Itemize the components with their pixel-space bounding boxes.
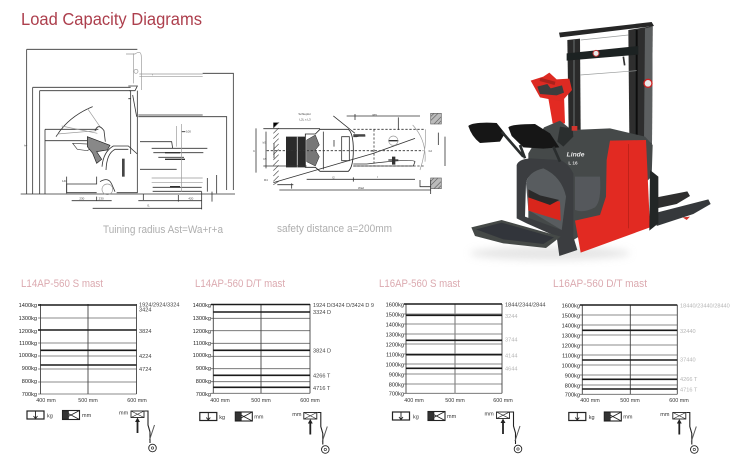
mast height labels: 4266 T xyxy=(680,377,698,383)
y axis labels: 900kg xyxy=(196,366,211,372)
x axis labels: 400 mm xyxy=(36,398,56,404)
y axis labels: 1600kg xyxy=(386,302,404,308)
mast height labels xyxy=(505,302,545,372)
y axis labels: 1400kg xyxy=(19,303,37,309)
mast height labels: 18440/23440/28440 xyxy=(680,304,730,310)
icons: load, centre of gravity, mast: kg xyxy=(219,415,225,421)
top view technical drawing: b xyxy=(253,149,255,153)
top view technical drawing: l xyxy=(377,175,378,179)
red side panel xyxy=(575,140,650,253)
side view technical drawing: h4 xyxy=(24,144,28,148)
mast xyxy=(567,39,581,130)
handles and console xyxy=(73,143,93,151)
plot lines xyxy=(580,305,677,394)
armrests xyxy=(468,123,505,143)
icons: load, centre of gravity, mast xyxy=(569,412,698,453)
mast height labels xyxy=(139,302,179,373)
x axis labels: 400 mm xyxy=(580,398,600,404)
mast height labels: 3824 xyxy=(139,329,151,335)
y axis labels: 800kg xyxy=(389,382,404,388)
chart title: L14AP-560 D/T mast xyxy=(195,278,285,290)
floor shadow xyxy=(470,247,630,260)
forks xyxy=(353,135,415,166)
icons: load, centre of gravity, mast: mm xyxy=(623,414,633,420)
right corner hatched pallets xyxy=(431,113,441,189)
mast height labels xyxy=(313,303,374,392)
title: Load Capacity Diagrams xyxy=(21,9,202,29)
top view technical drawing: R4 xyxy=(264,178,268,182)
y axis labels xyxy=(562,304,580,398)
logo on body: Linde xyxy=(567,152,585,159)
y axis labels: 1100kg xyxy=(386,352,404,358)
platform xyxy=(471,220,561,248)
mast height labels: 4644 xyxy=(505,366,517,372)
y axis labels: 1400kg xyxy=(193,303,211,309)
y axis labels: 1200kg xyxy=(19,329,37,335)
safety distance note: safety distance a=200mm xyxy=(277,223,392,235)
chart title: L16AP-560 D/T mast xyxy=(553,278,647,290)
side view technical drawing: 140 xyxy=(62,179,67,183)
dimensions xyxy=(256,114,445,194)
tiller xyxy=(548,95,565,123)
top view technical drawing: 365 xyxy=(372,113,377,117)
x axis labels: 600 mm xyxy=(669,398,689,404)
y axis labels: 1500kg xyxy=(562,314,580,320)
mast height labels: 3324 D xyxy=(313,310,331,316)
forklift truck photograph illustration xyxy=(468,22,711,260)
y axis labels: 1100kg xyxy=(193,341,211,347)
y axis labels: 1100kg xyxy=(19,341,37,347)
y axis labels xyxy=(193,303,211,398)
chart title: L14AP-560 S mast xyxy=(21,278,103,290)
icons: load, centre of gravity, mast: mm xyxy=(254,414,264,420)
y axis labels: 1300kg xyxy=(19,316,37,322)
hatched wall xyxy=(273,123,279,185)
x axis labels: 500 mm xyxy=(251,398,271,404)
y axis labels: 700kg xyxy=(196,392,211,398)
mast height labels: 37440 xyxy=(680,358,696,364)
x axis labels: 600 mm xyxy=(127,398,147,404)
top view technical drawing: Schlepfer xyxy=(298,112,311,116)
side view technical drawing: 230 xyxy=(79,196,85,200)
icons: load, centre of gravity, mast xyxy=(200,412,329,453)
y axis labels: 1000kg xyxy=(562,364,580,370)
mast height labels: 4224 xyxy=(139,354,151,360)
y axis labels: 1200kg xyxy=(386,342,404,348)
lowered forks xyxy=(152,178,203,182)
mast height labels: 4724 xyxy=(139,367,151,373)
y axis labels: 900kg xyxy=(22,366,37,372)
top view technical drawing: Wa2 xyxy=(358,186,364,190)
mast height labels: 1844/2344/2844 xyxy=(505,302,545,308)
x axis labels xyxy=(404,398,513,404)
icons: load, centre of gravity, mast: mm xyxy=(447,414,457,420)
side view technical drawing xyxy=(21,49,235,209)
mast height labels: 1924/2924/3324 xyxy=(139,302,179,308)
operator frame xyxy=(517,158,577,256)
top view technical drawing: b5 xyxy=(263,157,267,161)
mast height labels: 4716 T xyxy=(313,386,331,392)
truck chassis outline xyxy=(305,129,353,171)
icons: load, centre of gravity, mast: kg xyxy=(47,414,53,420)
battery block xyxy=(286,137,305,167)
icons: load, centre of gravity, mast: mm xyxy=(484,412,494,418)
y axis labels: 1000kg xyxy=(19,353,37,359)
y axis labels: 1300kg xyxy=(562,334,580,340)
main body dark shell xyxy=(528,121,653,240)
mast height labels: 3824 D xyxy=(313,348,331,354)
y axis labels: 900kg xyxy=(389,372,404,378)
red lower pod xyxy=(528,190,561,221)
dashed load box and centre lines xyxy=(267,129,425,166)
mast height labels xyxy=(680,304,730,394)
y axis labels: 1400kg xyxy=(386,322,404,328)
gray cylinder inside frame xyxy=(526,168,566,230)
icons: load, centre of gravity, mast: mm xyxy=(82,413,92,419)
pallet wheels xyxy=(388,140,398,165)
chart: L14AP-560 D/T mast xyxy=(193,278,374,453)
y axis labels: 900kg xyxy=(565,374,580,380)
x axis labels: 400 mm xyxy=(404,398,424,404)
ground line and vertical dimensions xyxy=(21,49,235,194)
x axis labels: 500 mm xyxy=(78,398,98,404)
bottom dimensions xyxy=(67,177,202,209)
side view technical drawing: 100 xyxy=(186,130,191,134)
top view technical drawing xyxy=(253,112,445,194)
mast height labels: 4144 xyxy=(505,354,517,360)
chart: L16AP-560 S mast xyxy=(379,278,545,453)
truck mast xyxy=(126,52,141,90)
icons: load, centre of gravity, mast xyxy=(27,410,156,452)
top view technical drawing: b2 xyxy=(429,149,432,153)
y axis labels: 1200kg xyxy=(193,329,211,335)
raised fork positions xyxy=(139,74,203,77)
y axis labels: 700kg xyxy=(389,392,404,398)
truck body outline xyxy=(102,146,137,193)
mast height labels: 3244 xyxy=(505,314,517,320)
icons: load, centre of gravity, mast: mm xyxy=(660,412,670,418)
top view technical drawing: l2 xyxy=(332,175,335,179)
x axis labels xyxy=(210,398,320,404)
y axis labels: 1200kg xyxy=(562,344,580,350)
right side dimensions xyxy=(207,175,217,202)
y axis labels: 1000kg xyxy=(386,362,404,368)
y axis labels: 1100kg xyxy=(562,354,580,360)
y axis labels: 800kg xyxy=(22,379,37,385)
y axis labels: 1500kg xyxy=(386,312,404,318)
chart title: L16AP-560 S mast xyxy=(379,278,460,290)
top view technical drawing: b5 xyxy=(263,140,266,144)
chart: L16AP-560 D/T mast xyxy=(553,278,730,453)
side view technical drawing: 420 xyxy=(188,196,194,200)
y axis labels: 700kg xyxy=(22,392,37,398)
mast height labels: 4266 T xyxy=(313,374,331,380)
turning radius formula: Tuining radius Ast=Wa+r+a xyxy=(103,224,224,236)
mast height labels: 4716 T xyxy=(680,388,698,394)
x axis labels: 500 mm xyxy=(445,398,465,404)
y axis labels: 1300kg xyxy=(193,316,211,322)
icons: load, centre of gravity, mast: kg xyxy=(413,414,419,420)
icons: load, centre of gravity, mast: mm xyxy=(119,410,129,416)
y axis labels: 1600kg xyxy=(562,304,580,310)
icons: load, centre of gravity, mast: mm xyxy=(292,412,302,418)
y axis labels: 1300kg xyxy=(386,332,404,338)
side view technical drawing: 230 xyxy=(99,196,104,200)
y axis labels: 1400kg xyxy=(562,324,580,330)
y axis labels xyxy=(19,303,37,398)
mast height labels: 32440 xyxy=(680,329,696,335)
mid fork positions xyxy=(152,148,207,157)
x axis labels: 600 mm xyxy=(493,398,513,404)
y axis labels: 1000kg xyxy=(193,353,211,359)
forklift truck photograph illustration: L 16 xyxy=(568,160,578,165)
y axis labels: 800kg xyxy=(196,379,211,385)
plot lines xyxy=(38,304,136,394)
tiller sweep arc xyxy=(56,107,93,137)
plot lines xyxy=(404,304,502,393)
icons: load, centre of gravity, mast xyxy=(392,412,522,453)
forks xyxy=(657,191,690,208)
y axis labels: 800kg xyxy=(565,384,580,390)
x axis labels xyxy=(36,398,147,404)
y axis labels: 700kg xyxy=(565,392,580,398)
x axis labels xyxy=(580,398,689,404)
top view technical drawing: b2 xyxy=(371,149,374,153)
plot lines xyxy=(211,304,310,393)
mast height labels: 1924 D/3424 D/3424 D 9 xyxy=(313,303,374,309)
mast height labels: 3744 xyxy=(505,338,517,344)
chart: L14AP-560 S mast xyxy=(19,278,179,452)
x axis labels: 600 mm xyxy=(300,398,320,404)
x axis labels: 500 mm xyxy=(620,398,640,404)
side view technical drawing: l1 xyxy=(147,204,150,208)
mast height labels: 3424 xyxy=(139,308,151,314)
y axis labels xyxy=(386,302,404,398)
x axis labels: 400 mm xyxy=(210,398,230,404)
top view technical drawing: L2L x L3 xyxy=(299,118,311,122)
icons: load, centre of gravity, mast: kg xyxy=(589,415,595,421)
